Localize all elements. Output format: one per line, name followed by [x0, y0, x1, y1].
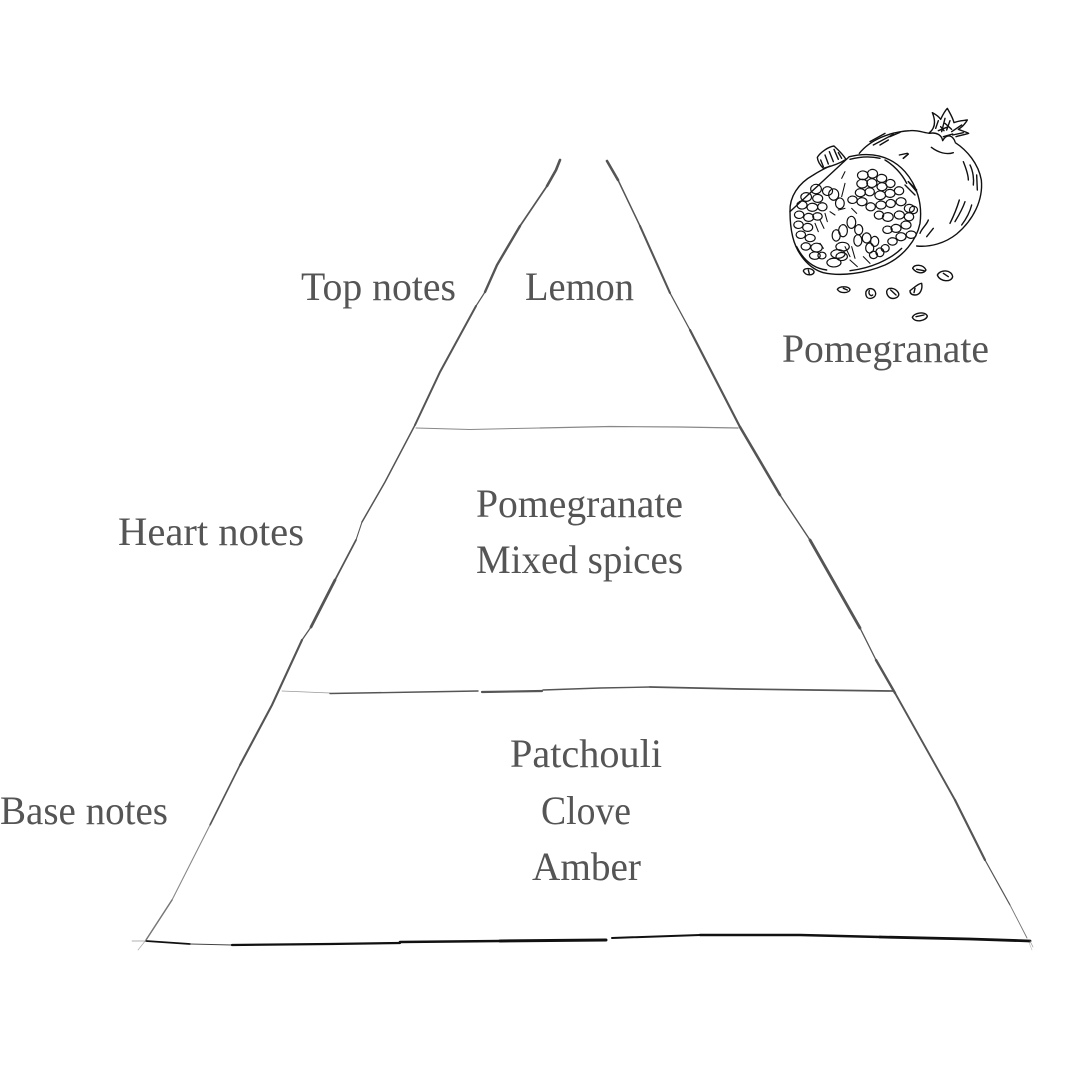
halved pomegranate shell: [790, 146, 921, 274]
seeds: left cluster: [794, 184, 844, 259]
pyramid right edge: [607, 161, 1032, 950]
base notes ingredient: Clove: Clove: [541, 788, 631, 833]
label: Top notes: Top notes: [301, 264, 456, 309]
seeds: upper right cluster: [848, 169, 917, 252]
base notes ingredient: Amber: Amber: [532, 844, 641, 889]
label: Base notes: Base notes: [0, 788, 168, 833]
label: Pomegranate ingredient: Pomegranate: [782, 326, 989, 371]
lower divider line: [282, 687, 893, 694]
pomegranate crown: [929, 108, 969, 137]
loose seeds: [803, 265, 953, 321]
label: Heart notes: Heart notes: [118, 509, 304, 554]
whole pomegranate: [859, 131, 982, 246]
heart notes ingredient: Pomegranate: Pomegranate: [476, 481, 683, 526]
upper divider line: [416, 426, 738, 430]
heart notes ingredient: Mixed spices: Mixed spices: [476, 537, 683, 582]
base notes ingredient: Patchouli: Patchouli: [510, 731, 662, 776]
pyramid left edge: [138, 160, 560, 950]
top notes ingredient: Lemon: Lemon: [525, 264, 634, 309]
pyramid base line: [132, 935, 1033, 947]
seeds: lower centre cluster: [815, 172, 884, 267]
icon: pomegranate illustration: [790, 108, 982, 321]
fragrance pyramid outline: [132, 160, 1033, 950]
